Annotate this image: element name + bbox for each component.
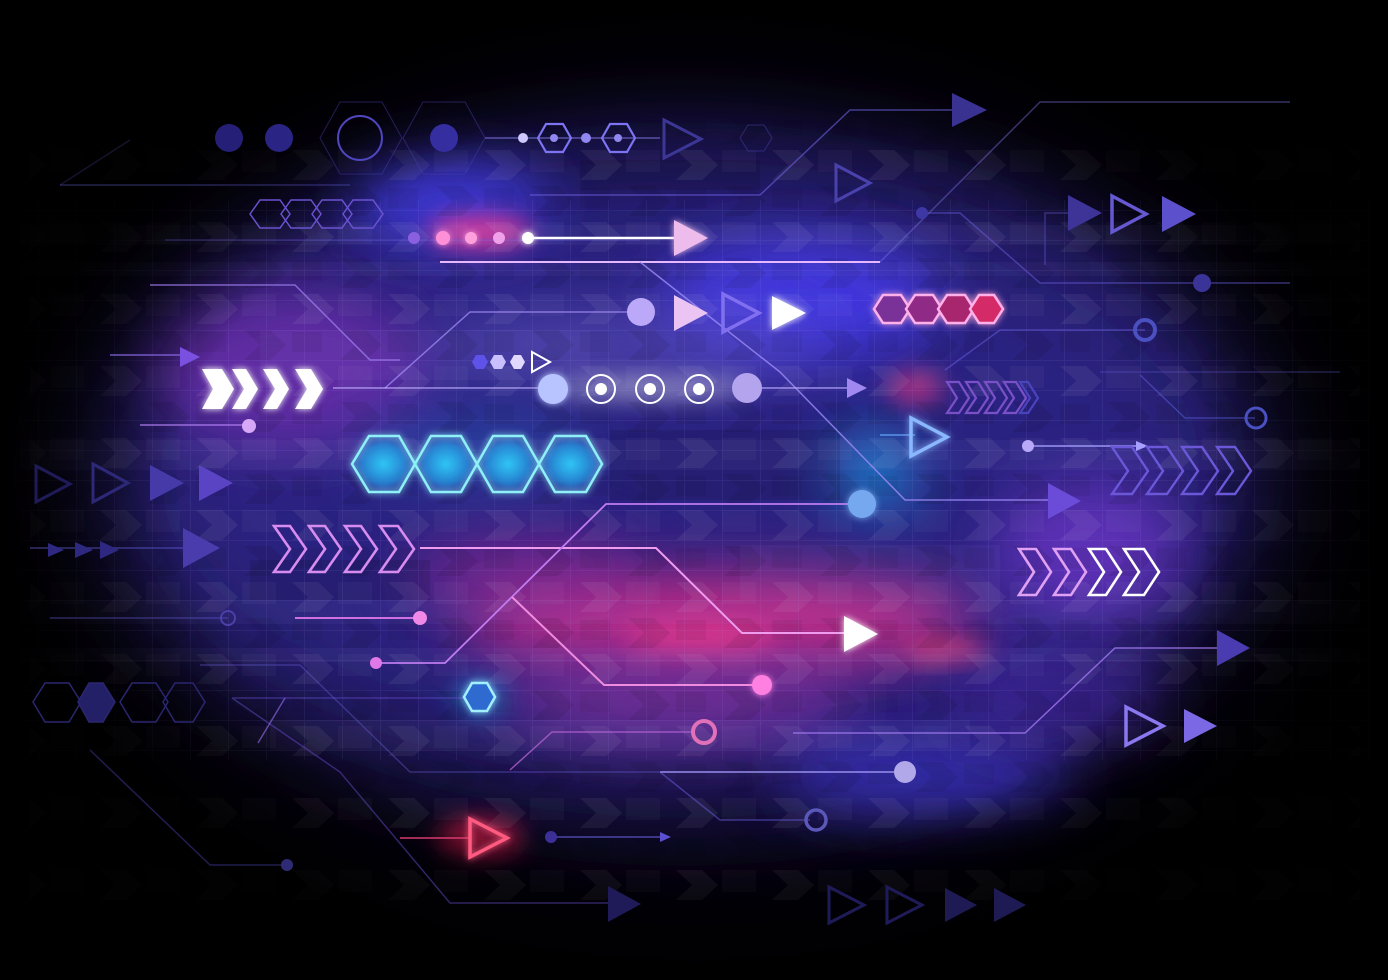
- pink hexagon row: [874, 295, 1003, 323]
- hexagon dots row, top: [518, 124, 635, 152]
- white arrow with dots: [408, 220, 708, 256]
- left triangles: [36, 464, 235, 625]
- pink chevrons, right: [1019, 549, 1159, 595]
- triangle trio, top right: [1068, 195, 1196, 232]
- right arrows, lower: [1126, 630, 1250, 745]
- purple chevron outlines: [947, 382, 1038, 413]
- hexagon and dots pointer: [180, 347, 550, 433]
- red neon triangle: [281, 819, 671, 871]
- pink chevrons, left: [274, 526, 414, 572]
- white chevron arrows: [202, 369, 323, 409]
- dim triangles, bottom: [608, 886, 1026, 923]
- background glow: [90, 140, 1270, 858]
- central white arrow: [370, 611, 916, 830]
- blue chevrons, right: [1112, 447, 1251, 494]
- top triangles: [664, 93, 987, 201]
- dim hexagons, lower left: [33, 683, 205, 722]
- dim circles and hexagons, top left: [215, 102, 772, 228]
- cyan triangle and circles: [848, 207, 1266, 519]
- circuit traces: [30, 102, 1340, 903]
- cyan hexagon row: [352, 436, 602, 492]
- circle and triangle row: [627, 294, 806, 332]
- glowing circles row: [538, 373, 867, 404]
